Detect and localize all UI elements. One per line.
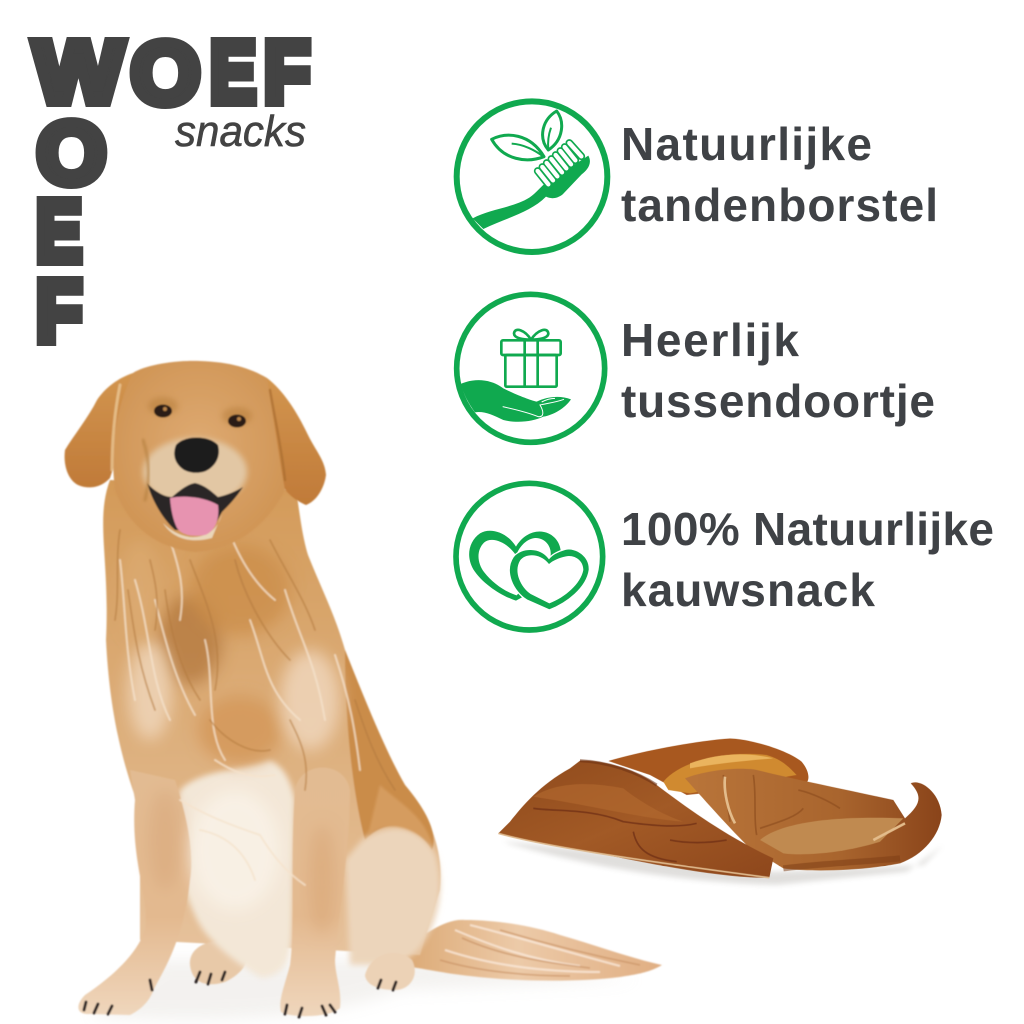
pig ear chews	[498, 738, 943, 885]
nose	[174, 438, 219, 473]
dog chest fur shading	[115, 520, 395, 935]
text: 100% Natuurlijke kauwsnack	[621, 503, 994, 616]
text: 100% Natuurlijke kauwsnack: 100% Natuurlijke	[621, 503, 994, 555]
icon: two hearts	[456, 483, 603, 630]
eyes	[154, 404, 246, 428]
dog right foreleg	[280, 768, 350, 1017]
lower lip	[163, 514, 222, 540]
mouth	[147, 483, 243, 530]
text: Natuurlijke tandenborstel	[621, 118, 938, 231]
logo wordmark horizontal: F	[264, 24, 310, 121]
head shape	[113, 361, 285, 552]
logo: Woef snacks	[34, 24, 310, 360]
chew front	[498, 761, 773, 878]
logo wordmark horizontal: E	[210, 24, 256, 121]
text: Natuurlijke tandenborstel: tandenborstel	[621, 179, 938, 231]
head highlights	[112, 385, 285, 500]
dog torso	[103, 480, 441, 955]
logo wordmark horizontal: W	[34, 24, 124, 121]
dog rear paws	[190, 941, 415, 990]
dog left foreleg	[78, 770, 191, 1015]
logo wordmark vertical: E	[36, 183, 82, 280]
text: 100% Natuurlijke kauwsnack: kauwsnack	[621, 564, 875, 616]
dog belly	[176, 760, 295, 978]
logo wordmark vertical	[36, 105, 106, 360]
chew right	[685, 769, 942, 870]
chew back	[608, 738, 808, 795]
muzzle	[143, 438, 247, 506]
chew shadow	[503, 842, 943, 885]
logo wordmark horizontal: O	[131, 25, 200, 122]
logo wordmark vertical: O	[37, 105, 106, 202]
text: Natuurlijke tandenborstel: Natuurlijke	[621, 118, 872, 170]
dog body	[78, 480, 662, 1017]
icon: gift on a hand	[457, 294, 605, 442]
right ear	[258, 378, 326, 505]
logo tagline: snacks	[175, 107, 306, 156]
logo wordmark vertical: F	[36, 263, 82, 360]
text: Heerlijk tussendoortje	[621, 314, 935, 427]
dog illustration	[65, 361, 662, 1020]
icon: toothbrush with leaves	[457, 101, 607, 252]
dog tail	[400, 920, 662, 981]
text: Heerlijk tussendoortje: Heerlijk	[621, 314, 799, 366]
dog haunch	[345, 650, 440, 965]
left ear	[65, 373, 138, 487]
face shading	[148, 397, 252, 425]
tongue	[170, 497, 218, 536]
text: Heerlijk tussendoortje: tussendoortje	[621, 375, 935, 427]
dog head	[65, 361, 326, 552]
logo wordmark horizontal	[34, 24, 310, 122]
